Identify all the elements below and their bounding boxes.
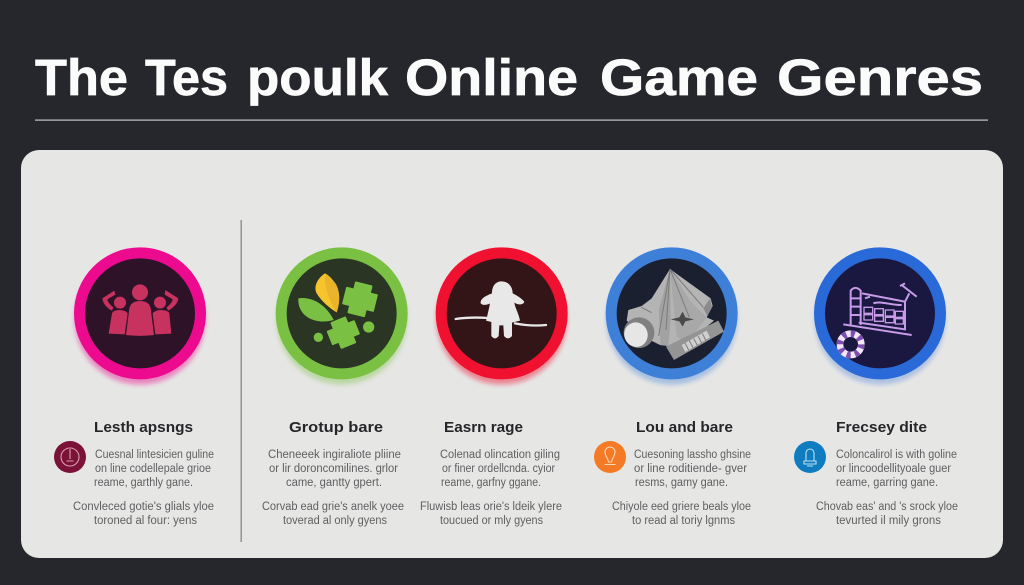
genre column: Easrn rage bbox=[420, 253, 567, 527]
small icon: bulb bbox=[594, 441, 626, 473]
description: tevurted il mily grons bbox=[836, 515, 941, 527]
description: reame, garring gane. bbox=[836, 477, 938, 489]
description: Cuesoning lassho ghsine bbox=[634, 449, 751, 461]
genre column: Frecsey dite bbox=[794, 253, 958, 527]
small icon: clock bbox=[54, 441, 86, 473]
description: Coloncalirol is with goline bbox=[836, 449, 957, 461]
description bbox=[73, 449, 214, 527]
heading: Lou and bare bbox=[636, 419, 733, 436]
description: Fluwisb leas orie's ldeik ylere bbox=[420, 501, 562, 513]
genre column: Grotup bare bbox=[262, 253, 407, 527]
description: toroned al four: yens bbox=[94, 515, 197, 527]
small icon: figure bbox=[794, 441, 826, 473]
title: Genres bbox=[777, 49, 983, 106]
description: to read al toriy lgnms bbox=[632, 515, 735, 527]
description: on line codellepale grioe bbox=[95, 463, 211, 475]
title: The bbox=[35, 49, 128, 106]
description: reame, garfny ggane. bbox=[441, 477, 541, 489]
description: Corvab ead grie's anelk yoee bbox=[262, 501, 404, 513]
description bbox=[262, 449, 404, 527]
badge: green leaves and crosses icon bbox=[276, 253, 407, 385]
description: reame, garthly gane. bbox=[94, 477, 193, 489]
description: toverad al only gyens bbox=[283, 515, 387, 527]
description: Chovab eas' and 's srock yloe bbox=[816, 501, 958, 513]
description: Cuesnal lintesicien guline bbox=[95, 449, 214, 461]
description: Convleced gotie's glials yloe bbox=[73, 501, 214, 513]
description: toucued or mly gyens bbox=[440, 515, 543, 527]
badge: blue tent and flashlight icon bbox=[606, 253, 737, 385]
title: Online bbox=[405, 49, 578, 106]
heading: Easrn rage bbox=[444, 419, 523, 436]
description: Cheneeek ingiraliote pliine bbox=[268, 449, 401, 461]
description bbox=[612, 449, 751, 527]
description: or line roditiende- gver bbox=[634, 463, 747, 475]
description: or lincoodellityoale guer bbox=[836, 463, 951, 475]
description: Colenad olincation giling bbox=[440, 449, 560, 461]
heading: Lesth apsngs bbox=[94, 419, 193, 436]
description: or lir doroncomilines. grlor bbox=[269, 463, 398, 475]
badge: red figure icon bbox=[436, 253, 567, 385]
genre column: Lou and bare bbox=[594, 253, 751, 527]
title: Tes bbox=[145, 49, 228, 106]
genre column: Lesth apsngs bbox=[54, 253, 214, 527]
badge: pink group icon bbox=[75, 253, 205, 385]
title: poulk bbox=[247, 49, 389, 106]
heading: Frecsey dite bbox=[836, 419, 927, 436]
heading: Grotup bare bbox=[289, 419, 383, 436]
description bbox=[420, 449, 562, 527]
description bbox=[816, 449, 958, 527]
description: Chiyole eed griere beals yloe bbox=[612, 501, 751, 513]
description: resms, gamy gane. bbox=[635, 477, 728, 489]
panel: genres bbox=[21, 150, 1003, 558]
title bbox=[35, 49, 983, 106]
description: came, gantty gpert. bbox=[286, 477, 382, 489]
title: Game bbox=[600, 49, 758, 106]
badge: indigo slot machine icon bbox=[815, 253, 945, 385]
description: or finer ordellcnda. cyior bbox=[442, 463, 555, 475]
